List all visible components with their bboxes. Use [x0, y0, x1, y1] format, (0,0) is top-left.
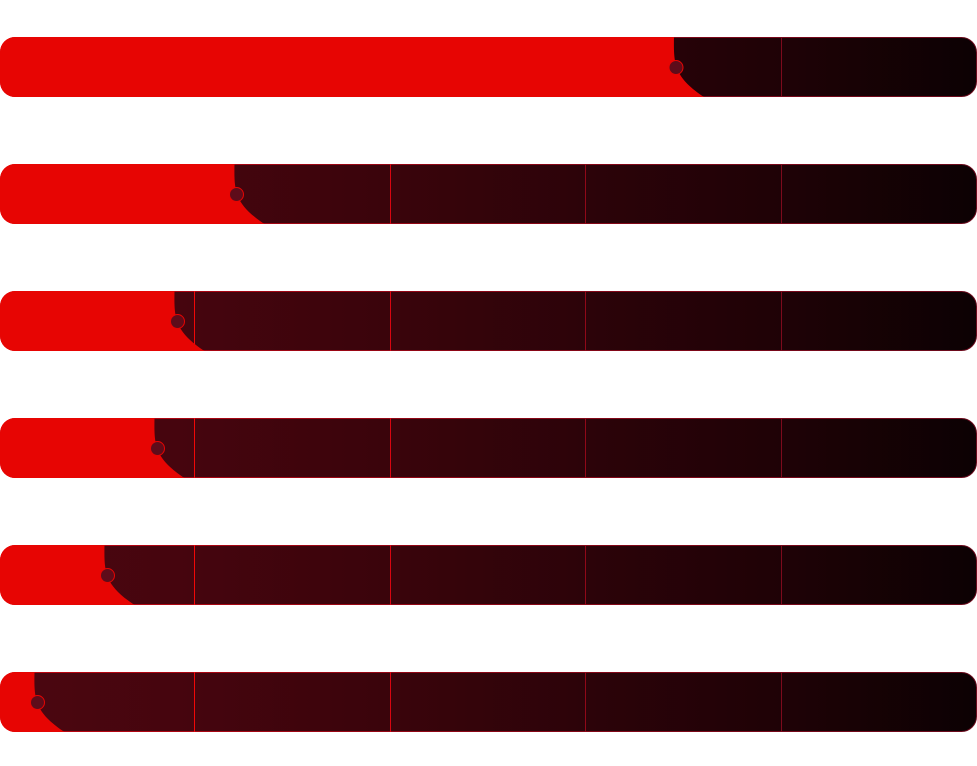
- bar 5: [0, 545, 976, 605]
- marker 4: [150, 442, 164, 456]
- bar 4: [0, 418, 976, 478]
- bar 6: [0, 672, 976, 732]
- marker 5: [100, 568, 114, 582]
- marker 2: [230, 188, 244, 202]
- marker 3: [170, 314, 184, 328]
- bar 1: [0, 37, 976, 97]
- marker 1: [669, 60, 683, 74]
- bar 2: [0, 164, 976, 224]
- bar 3: [0, 291, 976, 351]
- marker 6: [30, 696, 44, 710]
